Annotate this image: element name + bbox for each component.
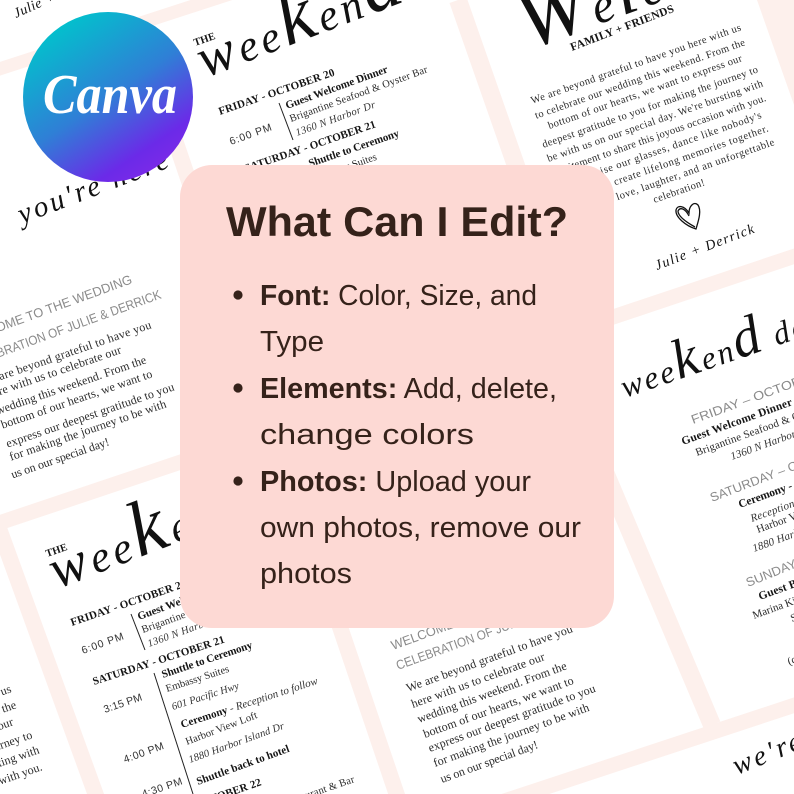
saturday schedule (91, 634, 320, 794)
paragraph: bottom of our hearts, we want to (421, 673, 575, 741)
saturday schedule: 3:15 PM (102, 691, 144, 716)
friday schedule: FRIDAY - OCTOBER 20 (217, 67, 337, 118)
icon: canva logo badge: Canva (43, 64, 177, 126)
paragraph: express our deepest gratitude to you (426, 681, 597, 755)
welcome message paragraph: deepest gratitude to you for making the journey to (541, 65, 760, 151)
heading: welcome to the wedding: WELCOME TO THE WEDDING (389, 577, 564, 653)
card: top schedule the weekend (180, 0, 430, 184)
friday schedule: Brigantine Seafood & Oyster Bar (140, 575, 282, 636)
saturday schedule: SATURDAY - OCTOBER 21 (243, 119, 377, 175)
list item: photos (233, 466, 581, 590)
sunday schedule (140, 774, 356, 794)
friday schedule: Guest Welcome Dinner (284, 64, 390, 112)
welcome message paragraph: to celebrate our wedding this weekend. From the (534, 37, 747, 122)
list item: photos: Photos: Upload your (260, 466, 531, 498)
list item: font: Type (260, 326, 324, 358)
welcome message paragraph: bottom of our hearts, we want to express our (547, 53, 744, 132)
card: welcome family and friends (503, 0, 776, 274)
saturday schedule: 4:00 PM (122, 740, 165, 766)
paragraph: bottom of our hearts, we want to (0, 367, 154, 432)
heading: welcome: FAMILY + FRIENDS (569, 3, 676, 54)
paragraph (404, 621, 597, 786)
panel: what can i edit (180, 165, 614, 628)
card: top left signature and you're here (10, 0, 176, 232)
list item: elements (233, 373, 557, 451)
saturday schedule: Shuttle to Ceremony (307, 127, 401, 170)
saturday details (708, 433, 794, 555)
welcome message paragraph: Here's to love, laughter, and an unforgettable (572, 137, 776, 218)
paragraph: express our deepest gratitude to you (4, 380, 176, 450)
card: weekend details (609, 264, 794, 668)
friday schedule (69, 575, 282, 657)
saturday schedule: SATURDAY - OCTOBER 21 (91, 634, 226, 688)
title: What Can I Edit? (226, 198, 568, 245)
friday details (680, 361, 794, 463)
paragraph: for making the journey to be with (431, 700, 591, 770)
saturday schedule: Embassy Suites (165, 664, 231, 695)
signature: Julie + Derrick: Julie + Derrick (653, 222, 757, 274)
heading: the weekend: weekend (32, 445, 268, 605)
card: top left signature and you're here: you're here (10, 143, 176, 232)
saturday schedule: 601 Pacific Hwy (171, 681, 241, 713)
list item: elements: change colors (260, 419, 474, 451)
welcome message paragraph: floor and create lifelong memories together. (568, 124, 770, 204)
card: bottom welcome message (389, 577, 597, 786)
paragraph: wedding this weekend. From the (415, 659, 568, 726)
paragraph: here with us to celebrate our (409, 649, 547, 711)
saturday schedule: Shuttle to Ceremony (160, 639, 255, 681)
paragraph: us on our special day! (9, 435, 111, 481)
heading: the weekend: THE (192, 31, 217, 49)
welcome message paragraph (530, 23, 776, 218)
icon: heart (676, 204, 700, 229)
saturday schedule: Shuttle back to hotel (195, 743, 291, 788)
sunday details (744, 521, 794, 668)
paragraph: us on our special day! (438, 737, 540, 786)
welcome message paragraph: We are beyond grateful to have you here with us (530, 23, 743, 107)
friday schedule: Brigantine Seafood & Oyster Bar (288, 64, 430, 125)
friday schedule: FRIDAY - OCTOBER 20 (69, 578, 189, 629)
welcome message paragraph: be with us on our special day. We're bursting with (546, 78, 765, 165)
heading: the weekend: THE (44, 542, 69, 560)
paragraph: We are beyond grateful to have you (404, 621, 574, 695)
friday schedule (217, 64, 430, 148)
card: left welcome to the wedding (0, 272, 176, 481)
icon: canva logo badge (23, 12, 193, 182)
saturday schedule: 1880 Harbor Island Dr (187, 721, 287, 766)
card: bottom schedule the weekend (32, 445, 356, 794)
paragraph (0, 318, 176, 481)
list item: photos: photos (260, 558, 352, 590)
friday schedule: 6:00 PM (80, 630, 125, 657)
list item: photos: own photos, remove our (260, 512, 581, 544)
welcome message paragraph: Let's raise our glasses, dance like nobody's (565, 110, 763, 189)
list item: elements: Elements: Add, delete, (260, 373, 557, 405)
list item: font: Font: Color, Size, and (260, 280, 537, 312)
heading: welcome to the wedding: CELEBRATION OF JULIE & DERRICK (394, 589, 592, 673)
saturday schedule: Harbor View Loft (184, 710, 259, 748)
welcome message paragraph: excitement to share this joyous occasion with you. (553, 93, 768, 178)
friday schedule: 1360 N Harbor Dr (146, 610, 230, 650)
friday schedule: Guest Welcome Dinner (136, 575, 242, 623)
paragraph: for making the journey to be with (7, 397, 168, 464)
card: bottom left welcome message (0, 681, 44, 788)
friday schedule: 6:00 PM (228, 121, 273, 148)
welcome message paragraph: celebration! (652, 177, 706, 206)
saturday schedule: Ceremony - Reception to follow (179, 675, 320, 731)
list item: font (233, 280, 537, 358)
friday schedule: 1360 N Harbor Dr (294, 99, 378, 139)
saturday schedule: Embassy Suites (312, 152, 378, 184)
